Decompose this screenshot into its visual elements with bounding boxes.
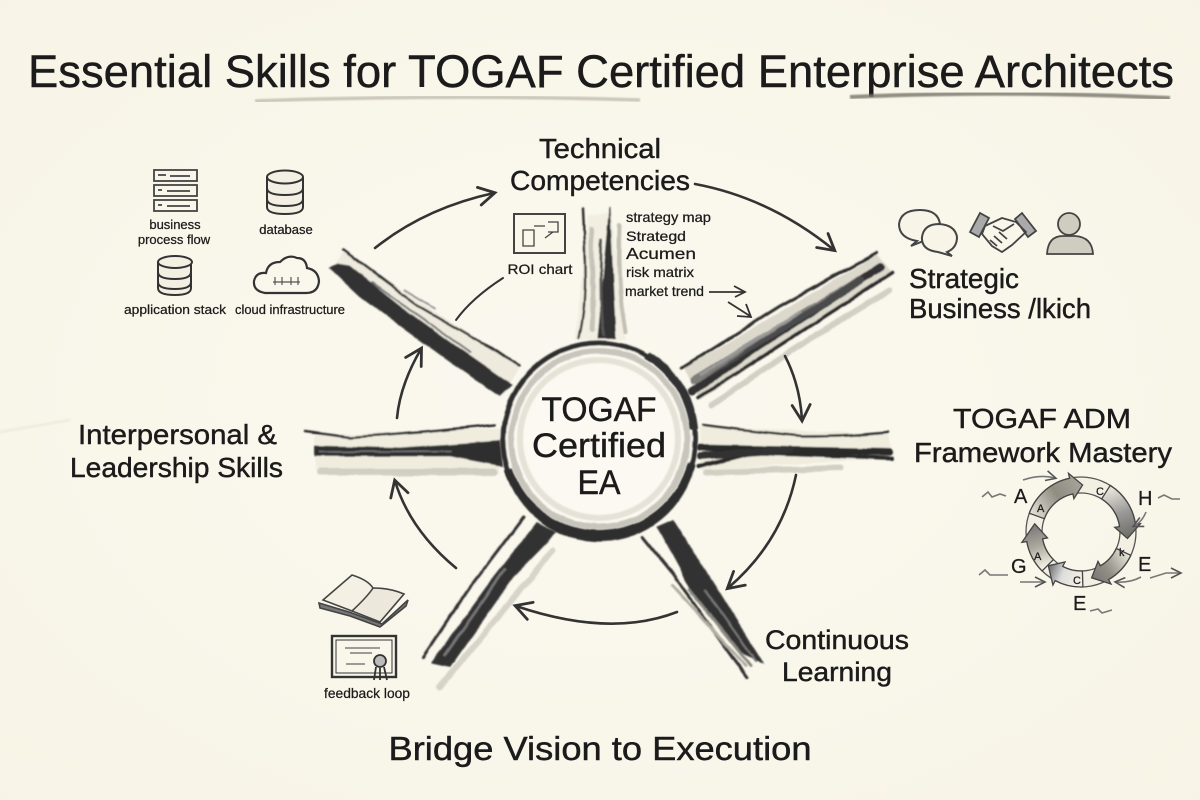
label: cloud infrastructure: cloud infrastructure: [235, 302, 345, 317]
heading: Continuous Learning: Continuous: [765, 625, 909, 655]
icon: person: [1047, 213, 1093, 254]
icon: open book: [319, 575, 408, 627]
heading: TOGAF ADM Framework Mastery: Framework Mastery: [914, 437, 1172, 468]
icon: certificate: [332, 636, 396, 680]
icon: ROI chart: [514, 214, 565, 253]
label: business process flow: process flow: [138, 232, 211, 247]
hub circle: [503, 343, 698, 542]
icon: business process flow: [154, 170, 197, 211]
icon group: strategic acumen: [508, 209, 751, 317]
spoke: left: [305, 425, 503, 474]
icon: database: [267, 170, 303, 214]
heading: Strategic Business: Business /lkich: [909, 293, 1091, 324]
text block: strategy items: Acumen: [626, 246, 696, 263]
heading: Interpersonal and Leadership Skills: [70, 419, 283, 483]
title: Essential Skills for TOGAF Certified Enterprise Architects: [28, 46, 1174, 97]
heading: Strategic Business: Strategic: [909, 263, 1019, 294]
icon: ADM cycle: C: [1073, 575, 1081, 587]
hub label: [532, 391, 666, 502]
hub label: Certified: [532, 427, 666, 465]
icon: ADM cycle: A: [1034, 551, 1042, 563]
arrows: clockwise cycle: [375, 184, 834, 624]
label: ROI chart: ROI chart: [508, 261, 573, 277]
squiggles and small arrows: [979, 476, 1180, 613]
icon: application stack: [158, 256, 192, 295]
spoke: right: [698, 425, 893, 472]
labels: ADM phases: G: [1011, 556, 1027, 578]
label: business process flow: [138, 217, 211, 247]
heading: Strategic Business: [909, 263, 1091, 324]
labels: ADM phases: H: [1138, 488, 1152, 510]
tagline: Bridge Vision to Execution: [388, 730, 812, 767]
icon: handshake: [970, 213, 1036, 252]
icon: ADM cycle: C: [1096, 486, 1104, 498]
heading: Continuous Learning: Learning: [782, 657, 892, 687]
heading: Continuous Learning: [765, 625, 909, 687]
icon: cloud infrastructure: [254, 257, 319, 293]
spoke: lower right: [643, 520, 763, 677]
hub and spoke diagram: [305, 207, 893, 687]
labels: ADM phases: A: [1014, 486, 1028, 508]
panel: learning icons: [319, 575, 410, 701]
text block: strategy items: Strategd: [626, 228, 686, 244]
spoke: upper left: [330, 250, 520, 396]
spoke: upper right: [682, 253, 892, 405]
spoke: lower left: [423, 517, 557, 687]
labels: ADM phases: E: [1073, 593, 1086, 615]
panel: TOGAF ADM: [914, 403, 1180, 615]
label: business process flow: business: [149, 217, 201, 232]
hub label: TOGAF: [542, 391, 656, 429]
heading: Technical Competencies: [510, 133, 690, 196]
icon group: technical: [124, 170, 345, 317]
heading: TOGAF ADM Framework Mastery: TOGAF ADM: [953, 403, 1131, 434]
labels: ADM phases: E: [1138, 554, 1151, 576]
icon: speech bubbles: [899, 210, 957, 256]
text block: strategy items: [625, 209, 711, 299]
text block: strategy items: market trend: [625, 283, 704, 299]
hub label: EA: [578, 464, 621, 502]
label: application stack: application stack: [124, 302, 227, 317]
labels: ADM phases: [1011, 486, 1152, 615]
panel: strategic business: [899, 210, 1093, 324]
label: database: database: [259, 222, 313, 237]
text block: strategy items: risk matrix: [626, 264, 694, 280]
heading: Technical Competencies: Technical: [539, 133, 661, 164]
arrows: market trend: [709, 286, 751, 317]
spoke: top: [575, 207, 626, 340]
label: feedback loop: feedback loop: [324, 685, 410, 701]
heading: Interpersonal and Leadership Skills: Leadership Skills: [70, 452, 283, 483]
text block: strategy items: strategy map: [626, 209, 711, 225]
heading: TOGAF ADM Framework Mastery: [914, 403, 1172, 468]
icon: ADM cycle: [1022, 473, 1140, 587]
heading: Technical Competencies: Competencies: [510, 165, 690, 196]
icon: ADM cycle: k: [1119, 547, 1125, 559]
heading: Interpersonal and Leadership Skills: Interpersonal &: [78, 419, 277, 450]
icon: ADM cycle: A: [1037, 503, 1045, 515]
